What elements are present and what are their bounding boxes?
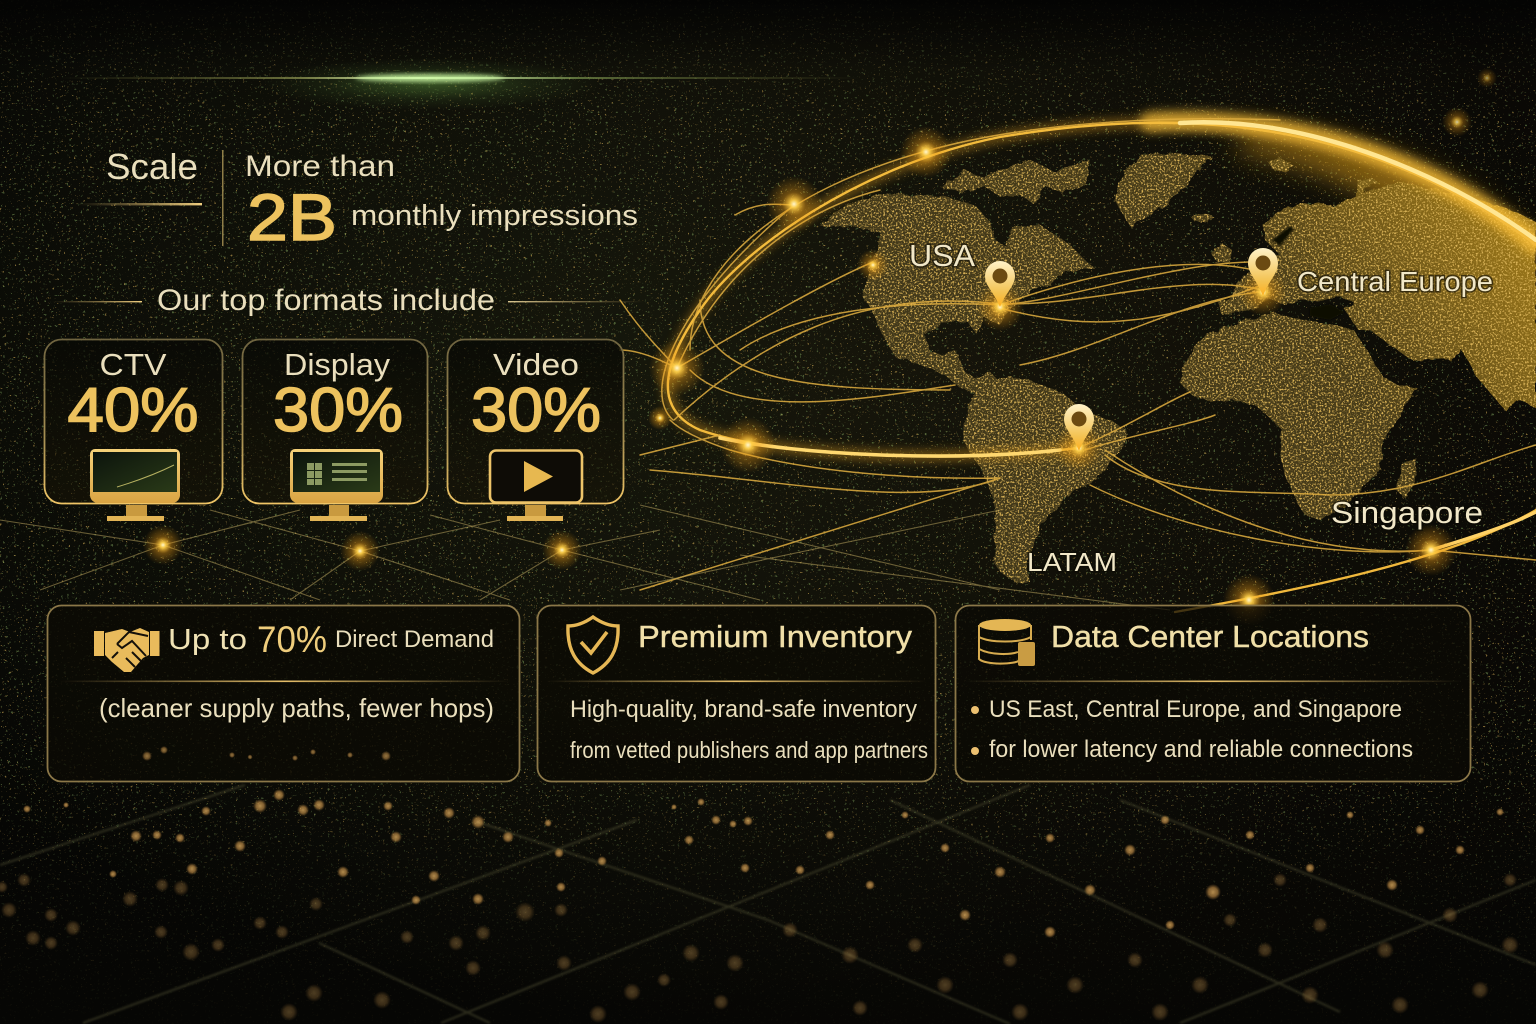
icon: TV monitor — [90, 449, 180, 521]
map label: Central Europe: Central Europe — [1297, 266, 1493, 297]
panel: data center locations — [956, 606, 1470, 782]
body text: High-quality, brand-safe inventory — [570, 696, 917, 723]
up to 70% direct demand — [168, 619, 494, 660]
heading: Premium Inventory — [638, 619, 913, 654]
up to 70% direct demand: 70% — [257, 619, 327, 660]
icon: handshake — [94, 628, 160, 672]
bright bokeh dots — [23, 789, 1504, 938]
card: Video: Video — [493, 347, 579, 382]
north america — [820, 194, 1095, 393]
connection arcs — [620, 119, 1536, 612]
floor grid lines — [0, 785, 1536, 1024]
card: Display: 30% — [273, 376, 403, 445]
network lines under format cards — [0, 505, 1170, 610]
pin: USA — [985, 261, 1015, 307]
thin routes — [620, 119, 1536, 590]
arctic islands — [940, 160, 1090, 205]
up to 70% direct demand: Direct Demand — [335, 626, 494, 653]
continents — [820, 152, 1536, 583]
card: CTV — [44, 340, 222, 521]
bullets — [971, 696, 1413, 763]
glow on globe rim — [1240, 130, 1536, 330]
bokeh floor — [0, 785, 1536, 1024]
world map globe — [820, 130, 1536, 583]
pin: LATAM — [1064, 404, 1094, 451]
madagascar — [1396, 458, 1417, 498]
heading: Data Center Locations — [1051, 619, 1369, 654]
dark sea shapes over land — [1272, 226, 1345, 320]
monthly impressions: monthly impressions — [351, 200, 638, 232]
icon: server stack — [979, 619, 1035, 666]
heading: our top formats: Our top formats include — [157, 284, 495, 317]
card: CTV: CTV — [100, 347, 167, 382]
scale label: Scale — [106, 146, 198, 187]
main loop — [668, 123, 1536, 456]
panel: premium inventory — [538, 606, 936, 782]
icon: shield — [568, 617, 618, 673]
icon: display ads monitor — [290, 449, 383, 521]
card: Display: Display — [284, 347, 391, 382]
south america — [963, 377, 1126, 583]
up to 70% direct demand: Up to — [168, 624, 247, 656]
glowing nodes — [143, 68, 1497, 626]
africa — [1180, 313, 1417, 520]
eurasia — [1217, 183, 1536, 410]
card: Video: 30% — [471, 376, 601, 445]
lower right bright arc — [1175, 510, 1536, 612]
map label: Singapore: Singapore — [1331, 495, 1483, 530]
top green light streak — [60, 58, 860, 110]
pin: Central Europe — [1248, 248, 1278, 296]
2B figure: 2B — [247, 180, 337, 254]
map label: LATAM: LATAM — [1027, 547, 1117, 577]
panel: premium inventory: from vetted publishers and app partners — [570, 737, 928, 763]
iceland and britain — [1190, 213, 1214, 222]
wide glow — [668, 123, 1536, 456]
card: CTV: 40% — [68, 376, 198, 445]
direct demand note: (cleaner supply paths, fewer hops) — [99, 693, 494, 723]
card: Display — [242, 340, 428, 521]
greenland — [1114, 152, 1212, 228]
icon: video monitor — [490, 450, 582, 521]
map label: USA: USA — [909, 238, 975, 273]
bullets: US East, Central Europe, and Singapore — [989, 696, 1402, 723]
more than: More than — [245, 150, 395, 183]
panel: direct demand — [48, 606, 520, 782]
bullets: for lower latency and reliable connections — [989, 736, 1413, 763]
dim bokeh dots — [0, 873, 1519, 1023]
headline: scale — [78, 146, 638, 254]
card: Video — [448, 340, 624, 521]
